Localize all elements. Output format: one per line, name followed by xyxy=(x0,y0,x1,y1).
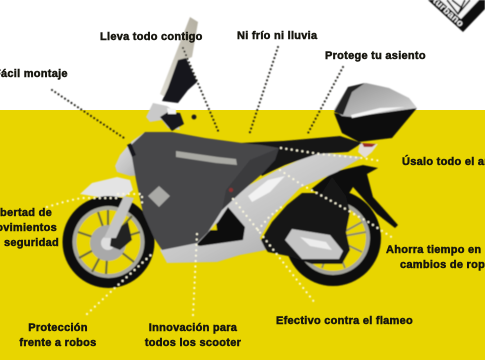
black dotted callout lines xyxy=(52,47,343,138)
label: Efectivo contra el flameo: Efectivo contra el flameo xyxy=(276,315,413,327)
rear wheel xyxy=(285,190,381,286)
top case xyxy=(334,83,417,142)
label: Protege tu asiento: Protege tu asiento xyxy=(325,50,426,62)
label: Innovación para todos los scooter: todos los scooter xyxy=(145,337,242,349)
seat xyxy=(240,136,362,176)
brand diamond patch xyxy=(148,186,170,207)
label: Protección frente a robos: Protección xyxy=(28,322,88,334)
cover shading xyxy=(222,148,279,210)
leg cover xyxy=(127,132,279,250)
label: Ni frío ni lluvia: Ni frío ni lluvia xyxy=(237,30,318,42)
scooter illustration xyxy=(47,17,417,315)
yellow gap behind cover xyxy=(210,223,217,230)
dark under-seat opening xyxy=(196,207,245,246)
windshield xyxy=(160,17,198,97)
zip pull xyxy=(229,188,233,192)
crankcase cover xyxy=(285,229,343,259)
front fairing xyxy=(115,132,155,176)
silver rear body and footboard xyxy=(160,152,363,263)
tail light xyxy=(358,143,378,158)
logo: Tucano Urbano xyxy=(428,0,485,32)
front fork xyxy=(104,196,134,238)
fastening strap xyxy=(127,143,136,157)
white dotted callout lines xyxy=(47,148,393,315)
label: Ahorra tiempo en cambios de ropa: Ahorra tiempo en xyxy=(386,244,481,256)
front mudguard xyxy=(80,177,133,197)
headlight fairing xyxy=(146,103,180,130)
label: Lleva todo contigo: Lleva todo contigo xyxy=(100,31,203,43)
yellow background band xyxy=(0,110,485,360)
front wheel xyxy=(62,196,154,288)
rear mudguard and hugger xyxy=(310,165,398,228)
label: Innovación para todos los scooter: Innovación para xyxy=(149,322,238,334)
reflective band xyxy=(176,151,237,165)
label: Protección frente a robos: frente a robos xyxy=(19,337,97,349)
handlebar and mirror bracket xyxy=(162,58,197,103)
engine block and wheel arch xyxy=(260,177,350,264)
